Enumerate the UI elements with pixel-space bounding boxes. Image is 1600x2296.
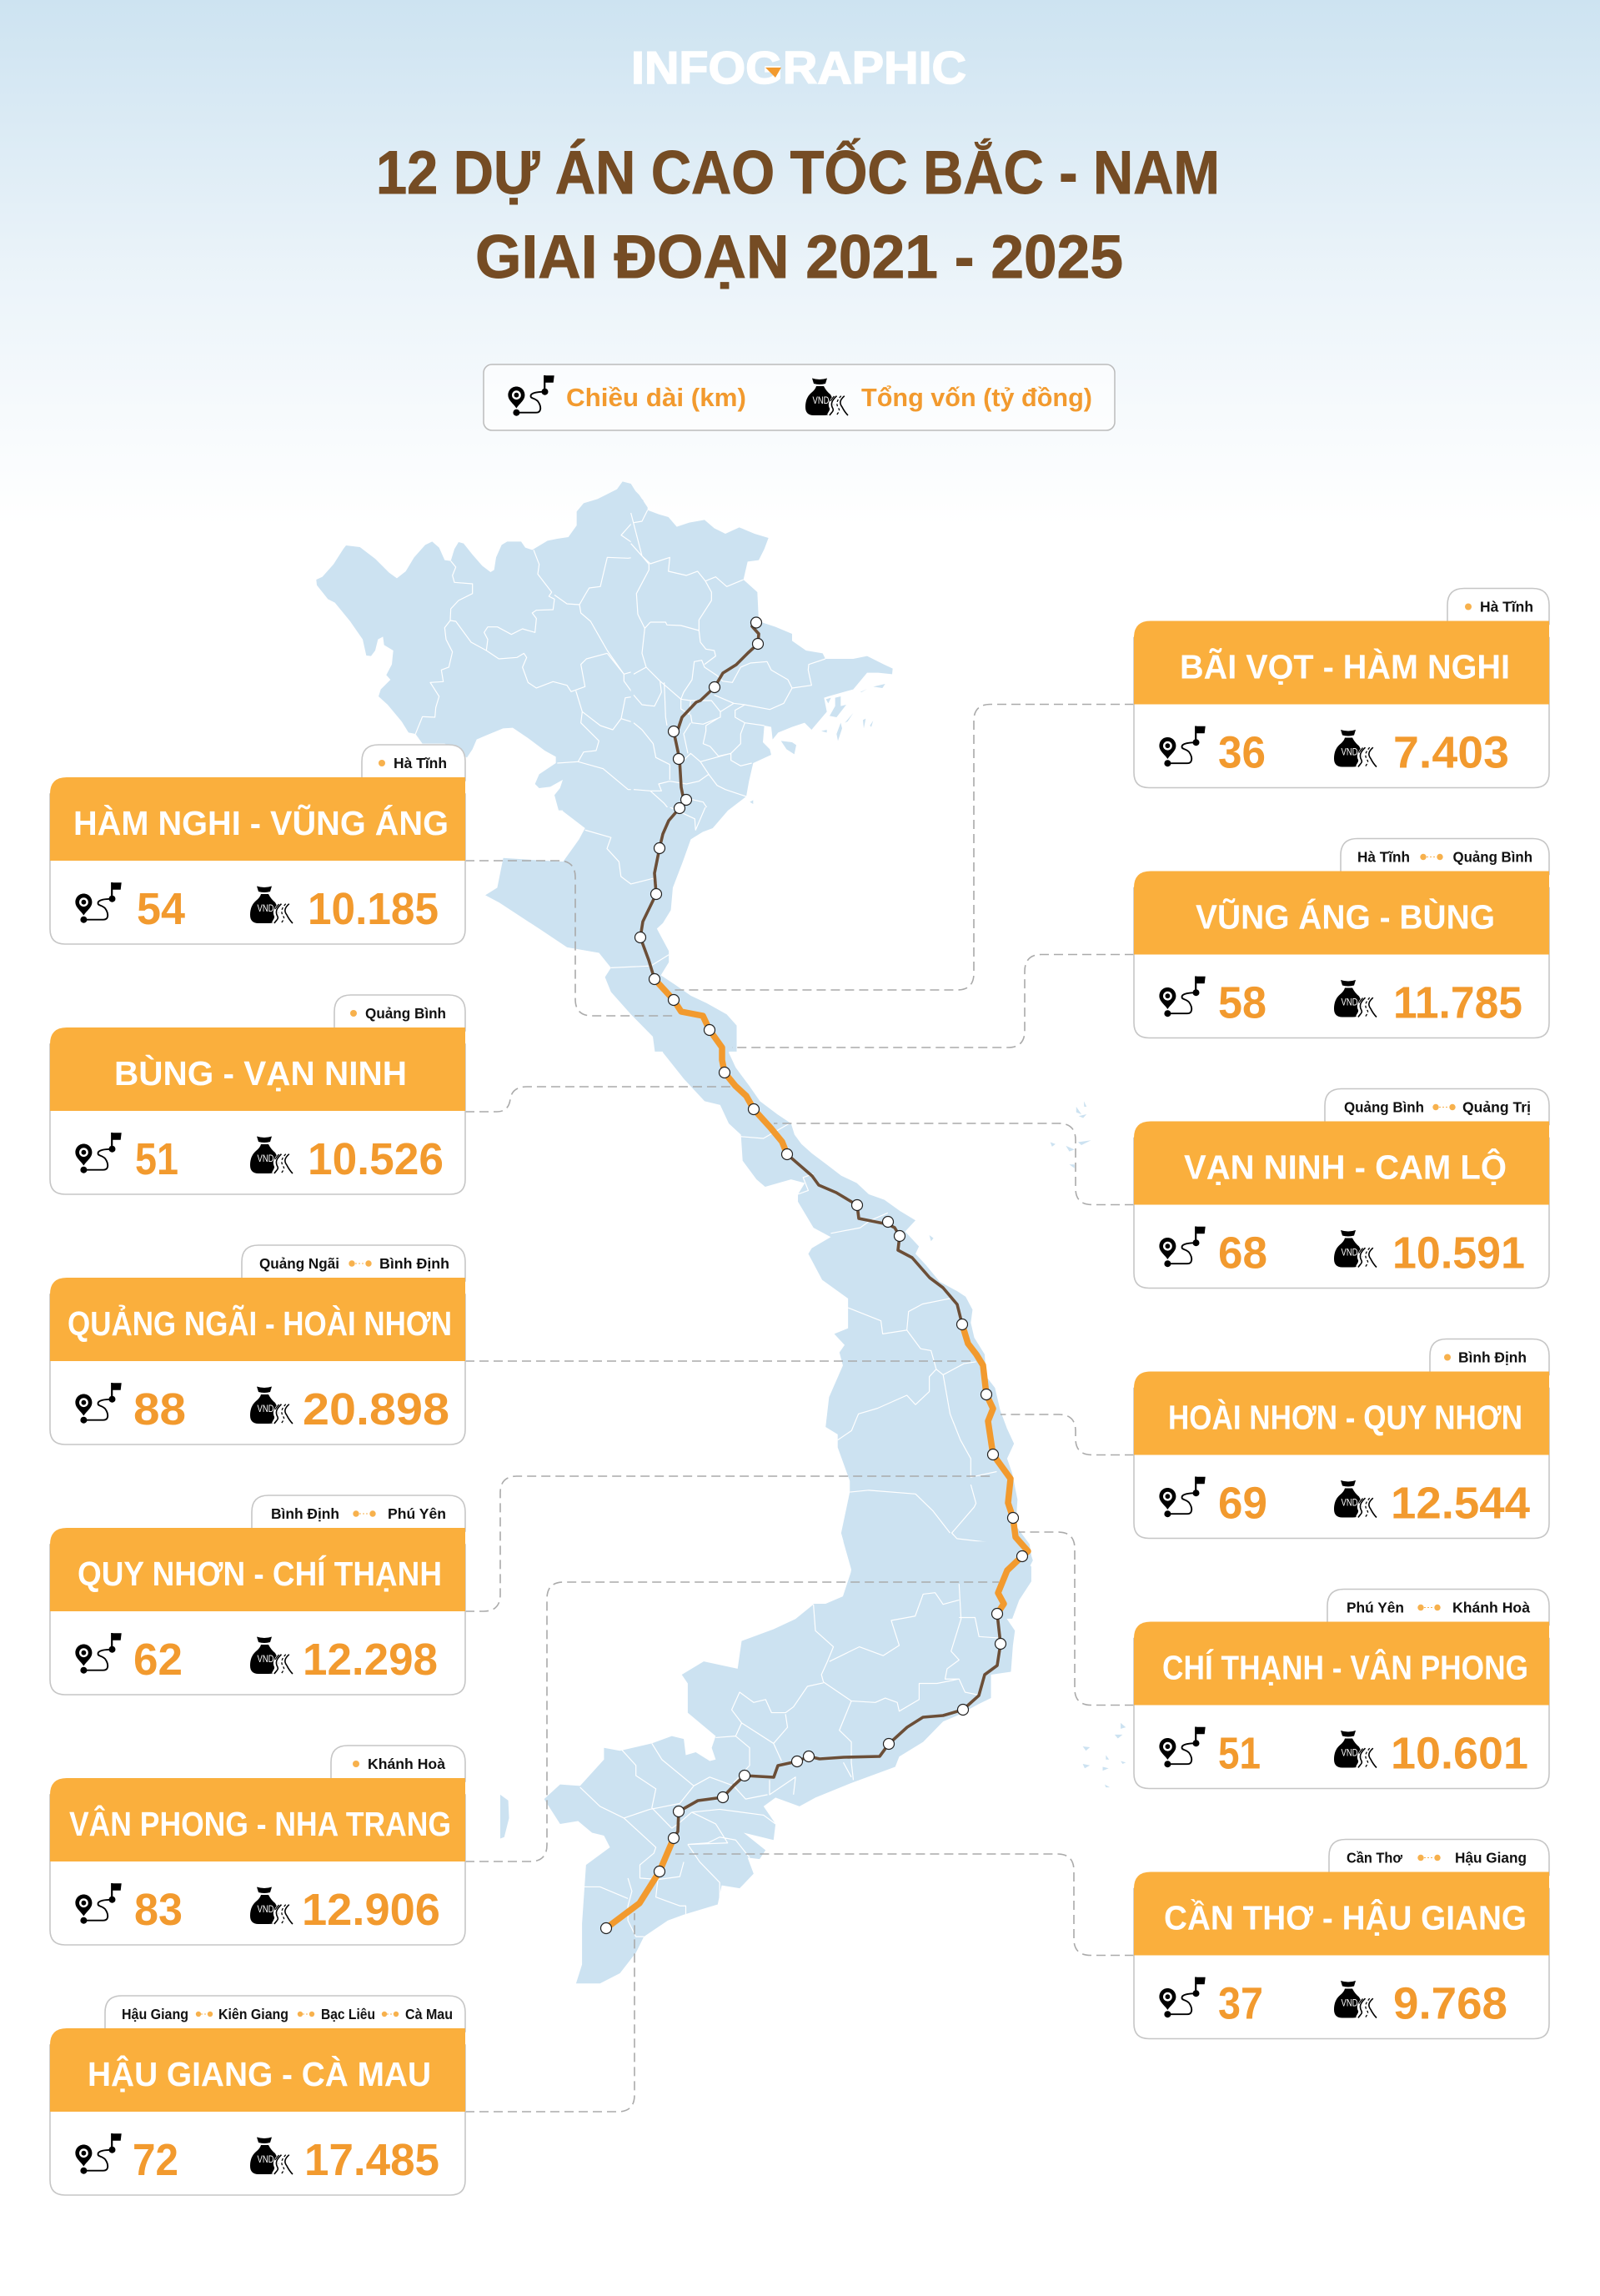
- card: Vạn Ninh - Cam Lộ: Quảng Trị: [1462, 1099, 1531, 1116]
- card: Chí Thạnh - Vân Phong: VND: [1341, 1748, 1357, 1758]
- card: Vân Phong - Nha Trang: Khánh Hoà: [368, 1756, 445, 1772]
- card: Quảng Ngãi - Hoài Nhơn: VND: [257, 1404, 273, 1414]
- card: Vũng Áng - Bùng: VŨNG ÁNG - BÙNG: [1196, 897, 1495, 936]
- card: Vũng Áng - Bùng: VND: [1341, 997, 1357, 1007]
- title: GIAI ĐOẠN 2021 - 2025: [475, 224, 1123, 291]
- route nodes: [600, 617, 1027, 1933]
- card: Quảng Ngãi - Hoài Nhơn: Quảng Ngãi: [259, 1255, 339, 1272]
- card: Vạn Ninh - Cam Lộ: VẠN NINH - CAM LỘ: [1184, 1148, 1507, 1186]
- card: Quảng Ngãi - Hoài Nhơn: QUẢNG NGÃI - HOÀI NHƠN: [68, 1304, 452, 1343]
- card: Cần Thơ - Hậu Giang: VND: [1341, 1998, 1357, 2008]
- title: 12 DỰ ÁN CAO TỐC BẮC - NAM: [376, 138, 1220, 207]
- card: Hoài Nhơn - Quy Nhơn: HOÀI NHƠN - QUY NHƠN: [1168, 1398, 1522, 1436]
- icon: route length: [508, 375, 554, 416]
- card: Hoài Nhơn - Quy Nhơn: 69: [1218, 1478, 1267, 1528]
- card: Bãi Vọt - Hàm Nghi: Hà Tĩnh: [1480, 599, 1533, 615]
- card: Vân Phong - Nha Trang: 12.906: [302, 1885, 440, 1935]
- icon: money bag: VND: [812, 396, 829, 406]
- card: Hậu Giang - Cà Mau: HẬU GIANG - CÀ MAU: [88, 2055, 431, 2093]
- card: Bùng - Vạn Ninh: [50, 995, 465, 1194]
- card: Hậu Giang - Cà Mau: VND: [257, 2155, 273, 2165]
- card: Bùng - Vạn Ninh: BÙNG - VẠN NINH: [114, 1054, 407, 1093]
- card: Hàm Nghi - Vũng Áng: 54: [137, 884, 185, 934]
- card: Quảng Ngãi - Hoài Nhơn: Bình Định: [379, 1255, 449, 1272]
- card: Quy Nhơn - Chí Thạnh: VND: [257, 1655, 273, 1665]
- card: Bãi Vọt - Hàm Nghi: 7.403: [1393, 727, 1509, 777]
- map of Vietnam: [316, 481, 1126, 1983]
- card: Cần Thơ - Hậu Giang: 9.768: [1393, 1978, 1507, 2028]
- card: Hoài Nhơn - Quy Nhơn: Bình Định: [1458, 1349, 1527, 1366]
- card: Hàm Nghi - Vũng Áng: Hà Tĩnh: [394, 755, 447, 771]
- card: Cần Thơ - Hậu Giang: Hậu Giang: [1455, 1850, 1527, 1866]
- card: Vạn Ninh - Cam Lộ: 68: [1218, 1228, 1267, 1278]
- card: Hàm Nghi - Vũng Áng: [50, 745, 465, 944]
- card: Vân Phong - Nha Trang: [50, 1746, 465, 1945]
- card: Hậu Giang - Cà Mau: 72: [133, 2135, 178, 2185]
- icon: money bag: [805, 379, 848, 415]
- card: Quy Nhơn - Chí Thạnh: 12.298: [303, 1635, 438, 1685]
- card: Hàm Nghi - Vũng Áng: HÀM NGHI - VŨNG ÁNG: [73, 804, 449, 842]
- card: Vân Phong - Nha Trang: VÂN PHONG - NHA TRANG: [69, 1805, 451, 1843]
- logo: INFOGRAPHIC: INFOGRAPHIC: [631, 42, 966, 93]
- card: Bùng - Vạn Ninh: 10.526: [308, 1134, 444, 1184]
- card: Quy Nhơn - Chí Thạnh: QUY NHƠN - CHÍ THẠNH: [78, 1555, 442, 1593]
- card: Hàm Nghi - Vũng Áng: VND: [257, 904, 273, 914]
- card: Hậu Giang - Cà Mau: Cà Mau: [405, 2006, 453, 2022]
- card: Vũng Áng - Bùng: 58: [1218, 977, 1266, 1027]
- card: Hoài Nhơn - Quy Nhơn: VND: [1341, 1498, 1357, 1508]
- legend label: length: Chiều dài (km): [566, 383, 746, 412]
- card: Vân Phong - Nha Trang: VND: [257, 1905, 273, 1915]
- card: Cần Thơ - Hậu Giang: 37: [1218, 1978, 1263, 2028]
- card: Bùng - Vạn Ninh: Quảng Bình: [365, 1005, 446, 1022]
- card: Quy Nhơn - Chí Thạnh: Bình Định: [271, 1505, 339, 1522]
- card: Bùng - Vạn Ninh: 51: [135, 1134, 178, 1184]
- card: Vạn Ninh - Cam Lộ: [1134, 1089, 1549, 1288]
- card: Quảng Ngãi - Hoài Nhơn: [50, 1245, 465, 1444]
- card: Quảng Ngãi - Hoài Nhơn: 88: [133, 1384, 186, 1434]
- card: Bãi Vọt - Hàm Nghi: VND: [1341, 747, 1357, 757]
- card: Bùng - Vạn Ninh: VND: [257, 1154, 273, 1164]
- card: Hàm Nghi - Vũng Áng: 10.185: [308, 884, 439, 934]
- card: Hậu Giang - Cà Mau: [50, 1996, 465, 2195]
- card: Hoài Nhơn - Quy Nhơn: [1134, 1339, 1549, 1538]
- card: Hậu Giang - Cà Mau: Hậu Giang: [122, 2006, 188, 2022]
- card: Hậu Giang - Cà Mau: Kiên Giang: [218, 2006, 288, 2022]
- leader lines: [465, 704, 1134, 2112]
- card: Vạn Ninh - Cam Lộ: 10.591: [1392, 1228, 1525, 1278]
- card: Chí Thạnh - Vân Phong: [1134, 1590, 1549, 1788]
- legend label: capital: Tổng vốn (tỷ đồng): [861, 383, 1092, 412]
- card: Chí Thạnh - Vân Phong: 10.601: [1391, 1728, 1528, 1778]
- card: Hậu Giang - Cà Mau: Bạc Liêu: [321, 2006, 375, 2022]
- card: Chí Thạnh - Vân Phong: Phú Yên: [1347, 1600, 1404, 1616]
- card: Chí Thạnh - Vân Phong: 51: [1218, 1728, 1261, 1778]
- card: Bãi Vọt - Hàm Nghi: 36: [1218, 727, 1266, 777]
- card: Vạn Ninh - Cam Lộ: Quảng Bình: [1344, 1099, 1424, 1116]
- card: Hậu Giang - Cà Mau: 17.485: [304, 2135, 439, 2185]
- card: Bãi Vọt - Hàm Nghi: [1134, 589, 1549, 787]
- card: Vân Phong - Nha Trang: 83: [134, 1885, 183, 1935]
- card: Quy Nhơn - Chí Thạnh: 62: [133, 1635, 183, 1685]
- card: Vũng Áng - Bùng: Hà Tĩnh: [1357, 849, 1410, 866]
- card: Cần Thơ - Hậu Giang: CẦN THƠ - HẬU GIANG: [1164, 1898, 1527, 1937]
- card: Vạn Ninh - Cam Lộ: VND: [1341, 1248, 1357, 1258]
- card: Vũng Áng - Bùng: 11.785: [1393, 977, 1522, 1027]
- legend: [484, 364, 1115, 430]
- card: Chí Thạnh - Vân Phong: CHÍ THẠNH - VÂN PHONG: [1162, 1648, 1528, 1686]
- card: Quy Nhơn - Chí Thạnh: [50, 1495, 465, 1695]
- card: Hoài Nhơn - Quy Nhơn: 12.544: [1391, 1478, 1530, 1528]
- card: Quảng Ngãi - Hoài Nhơn: 20.898: [303, 1384, 449, 1434]
- card: Bãi Vọt - Hàm Nghi: BÃI VỌT - HÀM NGHI: [1180, 647, 1510, 686]
- card: Vũng Áng - Bùng: [1134, 839, 1549, 1037]
- card: Vũng Áng - Bùng: Quảng Bình: [1452, 849, 1532, 866]
- card: Cần Thơ - Hậu Giang: [1134, 1840, 1549, 2038]
- card: Cần Thơ - Hậu Giang: Cần Thơ: [1347, 1850, 1403, 1866]
- card: Quy Nhơn - Chí Thạnh: Phú Yên: [388, 1505, 446, 1522]
- expressway route: [606, 626, 1028, 1928]
- title: [376, 138, 1220, 291]
- card: Chí Thạnh - Vân Phong: Khánh Hoà: [1452, 1600, 1530, 1616]
